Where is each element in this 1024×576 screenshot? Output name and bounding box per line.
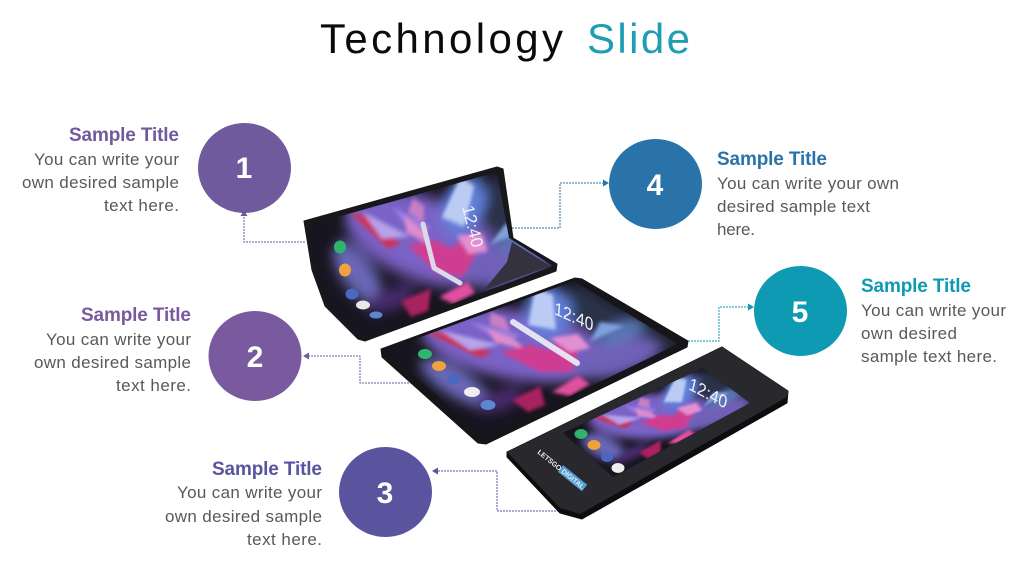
- text block 3: own desired sample: [165, 507, 322, 526]
- text block 3: [165, 459, 322, 549]
- circle 5: [754, 266, 847, 356]
- title: Technology: [320, 15, 563, 62]
- search bar: [423, 224, 460, 283]
- circle 1: 1: [236, 152, 252, 185]
- text block 3: text here.: [247, 530, 322, 549]
- text block 2: text here.: [116, 376, 191, 395]
- circle 4: 4: [647, 169, 664, 202]
- app icons: [418, 349, 496, 410]
- title: Slide: [587, 15, 690, 62]
- text block 4: Sample Title: [717, 149, 827, 170]
- search bar: [513, 322, 577, 363]
- text block 2: [34, 305, 191, 395]
- circle 1: [198, 123, 291, 213]
- text block 2: own desired sample: [34, 353, 191, 372]
- brand label: LETSGO DIGITAL: [536, 449, 586, 492]
- connector: device to circle 4: [512, 180, 609, 228]
- text block 2: Sample Title: [81, 305, 191, 326]
- text block 1: own desired sample: [22, 173, 179, 192]
- text block 4: You can write your own: [717, 174, 899, 193]
- circle 3: 3: [377, 477, 393, 510]
- clock: 12:40: [687, 373, 729, 413]
- circle 2: 2: [247, 341, 263, 374]
- circle 4: [609, 139, 702, 229]
- circle 2: [208, 311, 302, 401]
- text block 4: desired sample text: [717, 197, 870, 216]
- text block 2: You can write your: [46, 330, 191, 349]
- connector: device to circle 5: [688, 304, 754, 341]
- app icons: [334, 240, 382, 318]
- text block 1: You can write your: [34, 150, 179, 169]
- text block 3: You can write your: [177, 483, 322, 502]
- connector: device to circle 3: [432, 468, 562, 511]
- text block 5: Sample Title: [861, 276, 971, 297]
- circle 3: [339, 447, 432, 537]
- text block 5: sample text here.: [861, 347, 997, 366]
- circle 5: 5: [792, 296, 808, 329]
- connector: device to circle 1: [240, 210, 305, 242]
- clock: 12:40: [554, 298, 594, 336]
- connector: device to circle 2: [303, 352, 412, 383]
- text block 1: text here.: [104, 196, 179, 215]
- text block 1: [22, 125, 179, 215]
- device: closed phone: [506, 346, 788, 520]
- app icons: [574, 429, 624, 473]
- text block 5: [861, 276, 1006, 366]
- text block 5: own desired: [861, 324, 957, 343]
- title: [320, 15, 690, 62]
- text block 4: [717, 149, 899, 239]
- text block 4: here.: [717, 220, 755, 239]
- clock: 12:40: [458, 203, 487, 249]
- text block 5: You can write your: [861, 301, 1006, 320]
- text block 1: Sample Title: [69, 125, 179, 146]
- text block 3: Sample Title: [212, 459, 322, 480]
- device: open tablet: [380, 278, 688, 444]
- device: folded phone: [304, 166, 558, 342]
